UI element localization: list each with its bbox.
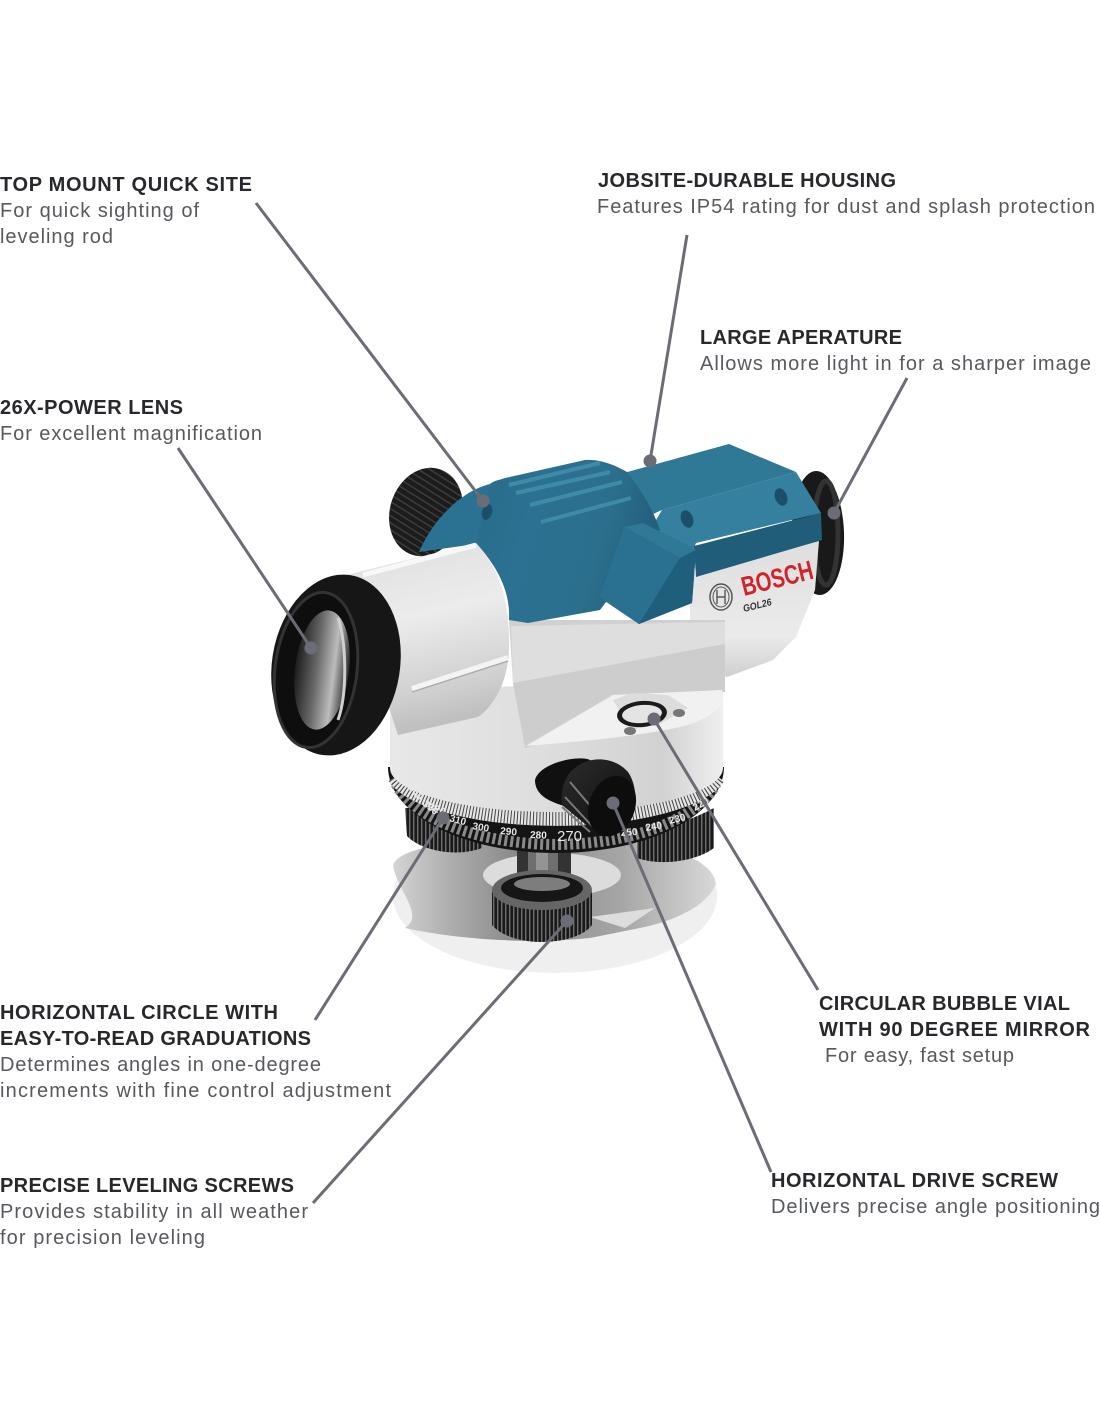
Bosch logo	[710, 555, 816, 615]
callout: top mount quick site: For quick sighting of	[0, 200, 199, 222]
dial numbers: 310	[448, 813, 468, 828]
dial numbers: 270	[557, 828, 582, 845]
leader line: top mount quick site	[256, 203, 490, 508]
left blue plate	[419, 484, 515, 552]
prism	[599, 523, 696, 624]
callout: circular bubble vial: CIRCULAR BUBBLE VIAL	[819, 993, 1070, 1015]
leader line: horizontal circle	[315, 812, 450, 1020]
callout: precise leveling screws	[0, 1175, 308, 1249]
rear block dark band	[694, 513, 822, 577]
callout: horizontal drive screw: HORIZONTAL DRIVE SCREW	[771, 1170, 1058, 1192]
callout: jobsite-durable housing: Features IP54 rating for dust and splash protection	[597, 196, 1095, 218]
callout: top mount quick site	[0, 174, 252, 248]
rear block side face	[650, 472, 821, 560]
dial numbers: 230	[668, 812, 687, 827]
hump ribs	[509, 463, 631, 522]
base cylinder	[390, 680, 723, 812]
rear silver body	[690, 541, 819, 677]
callout: top mount quick site: TOP MOUNT QUICK SITE	[0, 174, 252, 196]
callout: large aperature	[700, 327, 1091, 375]
silver neck	[509, 620, 725, 748]
dial numbers: 250	[620, 827, 638, 839]
leveling screw knurled nut	[492, 870, 592, 942]
callout: circular bubble vial: For easy, fast setup	[825, 1045, 1014, 1067]
callout: horizontal circle: EASY-TO-READ GRADUATIONS	[0, 1028, 311, 1050]
callout: large aperature: Allows more light in for a sharper image	[700, 353, 1091, 375]
leader line: leveling screws	[313, 914, 574, 1203]
leader line: housing	[644, 235, 687, 468]
dial numbers: 340	[406, 783, 425, 803]
callout: horizontal circle: HORIZONTAL CIRCLE WITH	[0, 1002, 278, 1024]
tube ribs	[363, 545, 508, 692]
centre ring on plate	[483, 853, 621, 897]
base plate	[393, 819, 717, 973]
callout: horizontal circle	[0, 1002, 391, 1102]
callout: precise leveling screws: Provides stability in all weather	[0, 1201, 308, 1223]
callout: horizontal drive screw	[771, 1170, 1100, 1218]
rear right foot screw	[637, 808, 714, 862]
silver front tube	[346, 543, 509, 735]
Bosch logo: GOL26	[742, 597, 773, 615]
front lens hood	[259, 565, 413, 765]
product illustration: optical level	[259, 444, 846, 973]
mounting holes	[480, 486, 790, 530]
callout: horizontal circle: Determines angles in one-degree	[0, 1054, 321, 1076]
leader line: bubble vial	[648, 712, 818, 990]
lens glass	[266, 588, 366, 752]
dial numbers: 330	[420, 799, 440, 818]
callout: circular bubble vial	[819, 993, 1091, 1067]
leveling screw post	[517, 845, 571, 895]
callout: precise leveling screws: PRECISE LEVELING SCREWS	[0, 1175, 294, 1197]
Bosch logo: BOSCH	[738, 555, 816, 602]
callout: top mount quick site: leveling rod	[0, 226, 113, 248]
leader line: lens	[178, 448, 318, 654]
callout: 26x-power lens	[0, 397, 262, 445]
dial numbers: 300	[471, 821, 490, 835]
rear left foot screw	[405, 808, 482, 852]
callout: horizontal drive screw: Delivers precise angle positioning	[771, 1196, 1100, 1218]
hump	[476, 460, 660, 623]
bubble vial	[613, 693, 688, 735]
callout: 26x-power lens: 26X-POWER LENS	[0, 397, 183, 419]
dial numbers: 350	[393, 768, 412, 788]
horizontal drive knob	[535, 758, 644, 843]
callout: 26x-power lens: For excellent magnification	[0, 423, 262, 445]
dial numbers: 290	[500, 826, 518, 838]
leader line: drive screw	[606, 796, 771, 1172]
blue housing	[419, 444, 822, 624]
dial numbers: 320	[427, 802, 447, 818]
dial numbers: 220	[691, 796, 711, 814]
horizontal circle dial	[388, 767, 724, 853]
rear eyepiece rings	[378, 458, 846, 596]
graduation ticks	[395, 777, 718, 818]
callout: jobsite-durable housing	[597, 170, 1095, 218]
base top surface	[526, 690, 723, 746]
callout: jobsite-durable housing: JOBSITE-DURABLE HOUSING	[598, 170, 896, 192]
dial numbers	[393, 768, 711, 845]
dial numbers: 240	[645, 820, 663, 834]
callout: large aperature: LARGE APERATURE	[700, 327, 902, 349]
callout: circular bubble vial: WITH 90 DEGREE MIRROR	[819, 1019, 1091, 1041]
callout: precise leveling screws: for precision leveling	[0, 1227, 205, 1249]
rear block top face	[620, 444, 796, 520]
leader line: aperture	[828, 378, 907, 520]
dial numbers: 280	[530, 830, 547, 842]
knurled rim	[396, 784, 716, 844]
callout: horizontal circle: increments with fine control adjustment	[0, 1080, 391, 1102]
